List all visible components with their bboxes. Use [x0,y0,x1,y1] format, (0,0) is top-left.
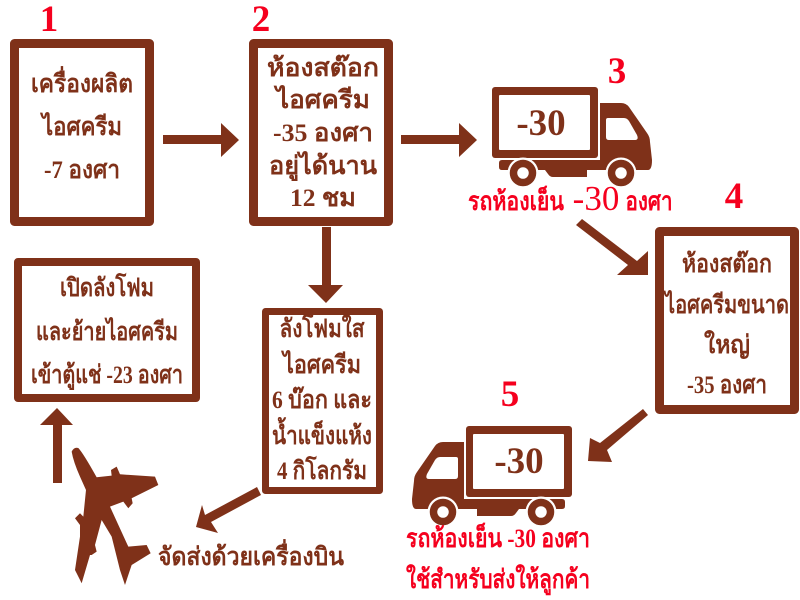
panel: foam box: น้ำแข็งแห้ง [272,416,372,450]
panel: open foam box: เปิดลังโฟม [60,272,154,302]
panel: foam box: ไอศครีม [280,349,361,379]
arrow: machine to stock room [163,123,239,157]
icon: refrigerated truck 5 [412,426,572,528]
arrow: foam box to plane [196,487,261,533]
caption: truck 3: รถห้องเย็น [468,185,564,216]
caption: truck 5 [406,522,590,596]
panel: open foam box: เข้าตู้แช่ -23 องศา [31,361,183,391]
panel: ice cream machine: เครื่องผลิต [31,66,133,98]
panel: open foam box: และย้ายไอศครีม [36,316,178,346]
caption: truck 3 [468,179,672,218]
icon: airplane [72,448,158,585]
panel: foam box: 6 บ๊อก และ [272,386,372,414]
caption: truck 5: รถห้องเย็น -30 องศา [406,522,590,553]
panel: large stock room: ใหญ่ [704,329,750,359]
panel: ice cream stock room [254,44,388,222]
panel: large stock room: ห้องสต๊อก [682,250,772,278]
number 5: 5 [501,374,519,415]
panel: large stock room: -35 องศา [687,372,767,399]
number 3: 3 [608,51,626,92]
arrow: stock room to truck [401,123,477,157]
panel: open foam box [18,262,196,398]
panel: ice cream stock room: อยู่ได้นาน [269,150,377,182]
arrow: stock room to foam box [308,227,343,303]
arrow: plane to unpacking [40,408,73,483]
arrow: large stock room to truck [588,409,648,462]
panel: foam box: 4 กิโลกรัม [277,455,367,485]
panel: ice cream stock room: 12 ชม [290,185,356,212]
caption: truck 5: ใช้สำหรับส่งให้ลูกค้า [406,564,590,596]
panel: ice cream machine: ไอศครีม [39,111,122,141]
number 1: 1 [40,0,58,40]
panel: large stock room [660,232,794,410]
caption: truck 3: องศา [626,187,672,216]
number 4: 4 [725,176,743,217]
panel: foam box: ลังโฟมใส [280,313,365,343]
panel: ice cream machine: -7 องศา [44,157,120,184]
arrow: truck to large stock room [576,219,648,275]
icon: refrigerated truck 3 [492,87,652,188]
panel: ice cream machine [14,44,150,222]
panel: foam box [266,312,380,490]
icon: refrigerated truck 5: -30 [494,441,544,482]
panel: ice cream stock room: -35 องศา [273,120,373,147]
number 2: 2 [252,0,270,40]
caption: air shipment: จัดส่งด้วยเครื่องบิน [158,539,344,571]
panel: ice cream stock room: ห้องสต๊อก [267,54,379,82]
icon: refrigerated truck 3: -30 [516,103,566,144]
caption: truck 3: -30 [573,179,619,218]
panel: ice cream stock room: ไอศครีม [273,84,370,114]
